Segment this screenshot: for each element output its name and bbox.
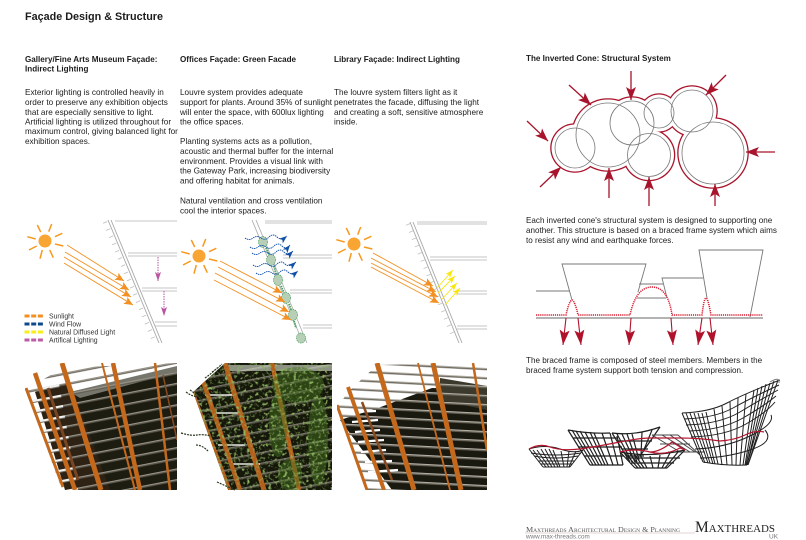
text block: offices green facade: the office spaces. [180,117,244,126]
text block: offices green facade: Planting systems acts as a pollution, [180,137,312,146]
footer branding [525,519,779,540]
text block: offices green facade: environment. Provides a visual link with [180,157,323,166]
third cone [612,427,660,462]
text block: offices green facade: cool the interior spaces. [180,206,266,215]
wind flow arrows [245,235,298,274]
text block: gallery lighting: Artificial lighting is utilized throughout for [25,117,171,126]
reaction arrows [563,318,713,345]
sunlight arrows [64,245,133,305]
red outer outline [550,85,749,189]
load arrows [527,71,775,206]
text block: offices green facade: the Gateway Park, increasing biodiversity [180,167,331,176]
climbing plants [269,367,328,491]
white gaps [350,411,398,472]
artificial lighting arrows [158,257,164,316]
footer: practice name: Maxthreads Architectural Design & Planning [526,525,680,534]
text block: library lighting: penetrates the facade, diffusing the light [334,98,480,107]
diagram: gallery facade lighting [27,220,177,343]
tall right cone [682,379,780,465]
facade dark interior [70,368,177,490]
diffused light arrows [437,270,460,305]
diagram: offices green facade [181,220,332,343]
text block: gallery lighting: that are especially sensitive to light. [25,108,154,117]
heading: inverted cone: The Inverted Cone: Structural System [526,54,671,63]
legend: sunlight: Sunlight [49,314,74,320]
text block: library lighting: The louvre system filters light as it [334,88,458,97]
red dotted load path [536,287,763,315]
text block: gallery lighting: exhibition spaces. [25,137,90,146]
diagram: braced frame section [536,250,763,345]
title: Façade Design & Structure [25,11,163,23]
text block: library lighting: inside. [334,117,358,126]
heading: offices facade: Offices Façade: Green Facade [180,55,297,64]
heading: gallery facade: Indirect Lighting [25,64,88,74]
louvres [26,363,177,490]
photo: gallery facade louvres [26,363,177,490]
text block: gallery lighting: maximum control, giving balanced light for [25,127,178,136]
footer: logo: Maxthreads [695,519,775,536]
louvres [337,363,487,490]
text block: offices green facade: will enter the space, with 600lux lighting [179,108,324,117]
diagram: structural cones plan [527,71,775,206]
photo: offices green facade [193,363,332,490]
diagram: library facade [336,222,487,343]
timber beams [337,363,487,490]
ground line [536,317,763,319]
text block: offices green facade: Natural ventilation and cross ventilation [180,196,323,205]
icon: sun [336,227,372,262]
text block: offices green facade: acoustic and thermal buffer for the internal [180,147,333,156]
louvres [193,363,332,490]
facade section [105,220,177,343]
timber beams [26,363,177,490]
icon: sun [27,224,63,259]
centre bowl [620,450,685,468]
text block: gallery lighting: Exterior lighting is controlled heavily in [25,88,164,97]
legend: natural diffused light: Natural Diffused Light [49,330,115,336]
text block: structural system: another. This structure is based on a braced frame system which aims [526,226,777,235]
rear cone [652,435,705,455]
sunlight arrows [214,261,291,320]
cone outlines [536,250,763,317]
heading: library facade: Library Façade: Indirect Lighting [334,55,460,64]
legend: wind flow: Wind Flow [49,322,81,328]
text block: braced frame: braced frame system support both tension and compression. [526,366,743,375]
second cone [568,430,624,465]
facade dark interior [340,388,487,490]
timber beams [193,363,299,490]
facade section [408,222,487,343]
legend [24,314,115,344]
trailing foliage [181,364,235,490]
small left bowl [529,446,583,467]
photo: library facade louvres [337,363,487,490]
sunlight arrows [371,253,439,303]
text block: library lighting: and creating a soft, sensitive atmosphere [334,108,484,117]
text block: structural system: to resist any wind and earthquake forces. [526,236,674,245]
heading: gallery facade: Gallery/Fine Arts Museum Façade: [25,55,157,64]
facade section [252,220,332,343]
icon: sun [181,239,217,274]
text block: structural system: Each inverted cone's structural system is designed to supporting one [526,216,773,225]
text block: offices green facade: Louvre system provides adequate [180,88,303,97]
legend: artificial lighting: Artifical Lighting [49,338,98,344]
text block: offices green facade: support for plants. Around 35% of sunlight [180,98,333,107]
text block: braced frame: The braced frame is composed of steel members. Members in the [526,356,763,365]
text block: gallery lighting: order to preserve any exhibition objects [25,98,168,107]
cone circles [555,90,744,184]
text block: offices green facade: and offering habitat for animals. [180,177,295,186]
facade dark interior [193,363,332,490]
planting [258,236,306,343]
wireframe model of cones [529,379,780,468]
red connecting line [529,431,764,453]
